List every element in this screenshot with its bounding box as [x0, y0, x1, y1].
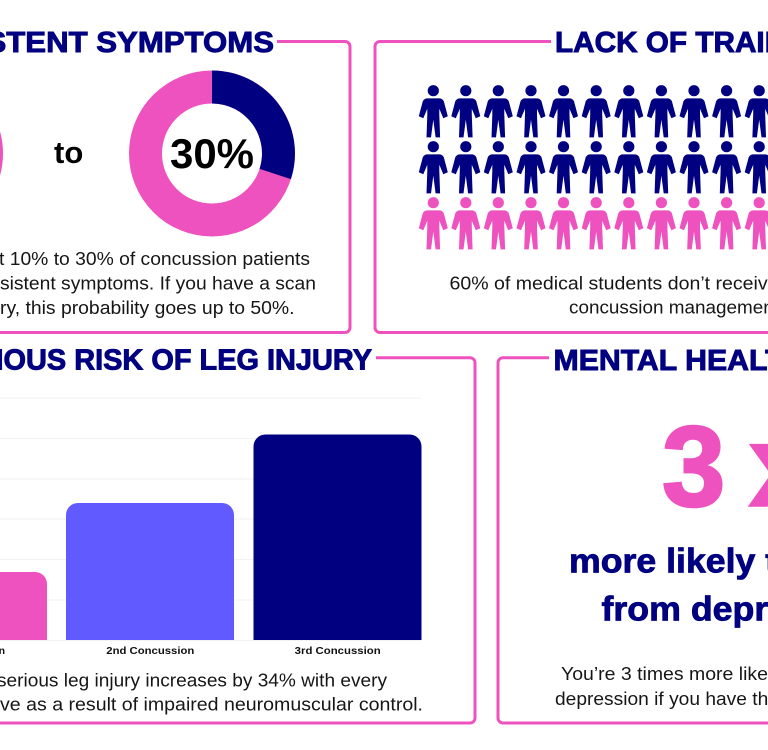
- panel: persistent symptoms: [0, 27, 350, 332]
- panel border: [375, 42, 768, 332]
- body text: [450, 274, 768, 318]
- panel border: [498, 358, 768, 723]
- body text: [0, 670, 423, 714]
- bar labels: 2nd Concussion: [106, 645, 194, 657]
- panel: lack of training: [375, 27, 768, 332]
- bar: 1st concussion: [0, 572, 47, 640]
- bar: 3rd concussion: [254, 434, 422, 640]
- panel border: [0, 358, 475, 723]
- body text: [555, 664, 768, 709]
- panel border: [0, 42, 350, 332]
- body text: t 10% to 30% of concussion patients: [0, 249, 310, 269]
- statement: [569, 542, 768, 628]
- body text: serious leg injury increases by 34% with every: [0, 670, 387, 690]
- connector word: to: [54, 135, 83, 170]
- bar labels: [0, 645, 381, 657]
- body text: concussion management: [569, 298, 768, 318]
- body text: ry, this probability goes up to 50%.: [0, 298, 294, 318]
- body text: ve as a result of impaired neuromuscular control.: [0, 694, 423, 714]
- donut chart: 30%: 30%: [170, 130, 254, 177]
- donut chart: 30%: [146, 70, 295, 220]
- body text: You’re 3 times more likely: [561, 664, 768, 684]
- bar labels: 3rd Concussion: [295, 645, 381, 657]
- body text: [0, 249, 316, 318]
- pictogram: people: [419, 85, 768, 249]
- panel: serious risk of leg injury: [0, 344, 475, 723]
- panel: mental health: [498, 345, 768, 723]
- bar chart: [0, 398, 422, 657]
- body text: 60% of medical students don’t receive: [450, 274, 768, 294]
- bar: 2nd concussion: [66, 503, 234, 640]
- body text: sistent symptoms. If you have a scan: [0, 274, 316, 294]
